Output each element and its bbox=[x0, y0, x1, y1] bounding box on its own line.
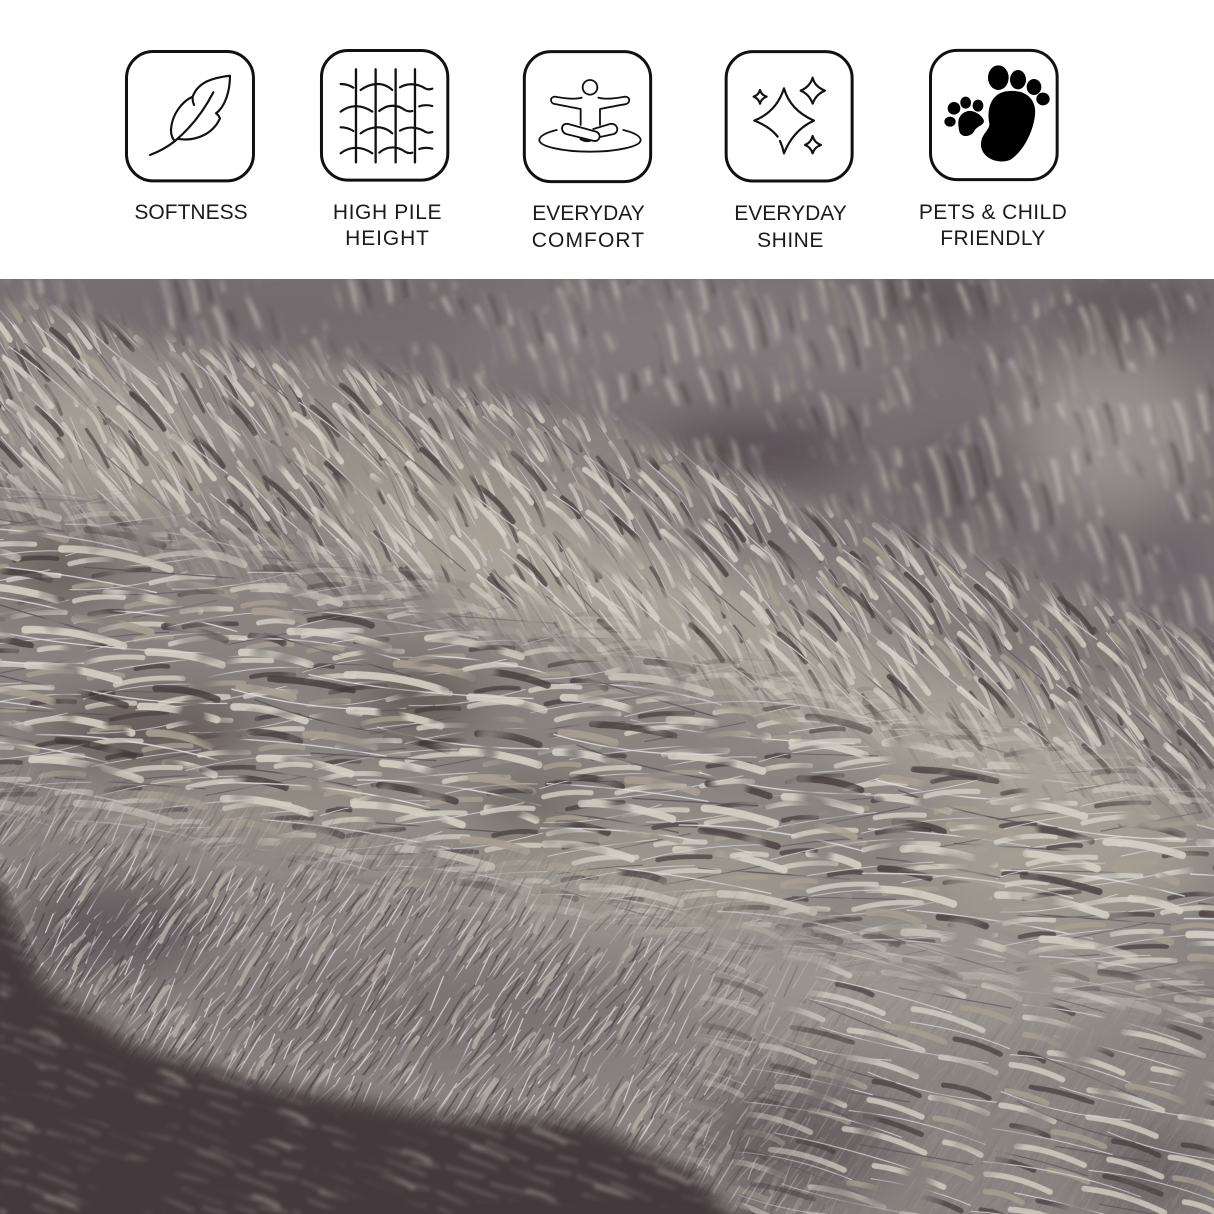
label: pets and child friendly: PETS & CHILD bbox=[919, 201, 1067, 224]
fibres: lower fold bbox=[0, 760, 1214, 1214]
label: high pile height: HIGH PILE bbox=[333, 201, 442, 224]
feature: softness bbox=[126, 51, 253, 224]
label: high pile height: HEIGHT bbox=[345, 227, 430, 250]
rug fold bbox=[0, 279, 1214, 1214]
icon: sparkles bbox=[726, 52, 852, 181]
label: everyday shine: EVERYDAY bbox=[734, 202, 847, 225]
photo: shaggy rug close-up bbox=[0, 279, 1214, 1214]
feature: pets and child friendly bbox=[919, 50, 1067, 250]
label: pets and child friendly: FRIENDLY bbox=[940, 227, 1046, 250]
label: everyday comfort: EVERYDAY bbox=[532, 202, 645, 225]
icon: feather bbox=[126, 51, 253, 181]
feature: high pile height bbox=[321, 50, 448, 250]
feature: everyday comfort bbox=[524, 52, 651, 252]
label: everyday shine: SHINE bbox=[757, 229, 824, 252]
background pile bbox=[4, 279, 1214, 630]
icon: pile fibres bbox=[321, 50, 448, 180]
dark pile lower left bbox=[0, 880, 800, 1214]
label: everyday comfort: COMFORT bbox=[532, 229, 645, 252]
fibres: middle fold bbox=[0, 462, 1214, 1029]
icon: paw and footprint bbox=[930, 50, 1057, 180]
feature: everyday shine bbox=[726, 52, 852, 252]
fibres: upper fold bbox=[0, 296, 1214, 829]
icon: meditating figure bbox=[524, 52, 651, 182]
label: softness: SOFTNESS bbox=[134, 201, 248, 224]
